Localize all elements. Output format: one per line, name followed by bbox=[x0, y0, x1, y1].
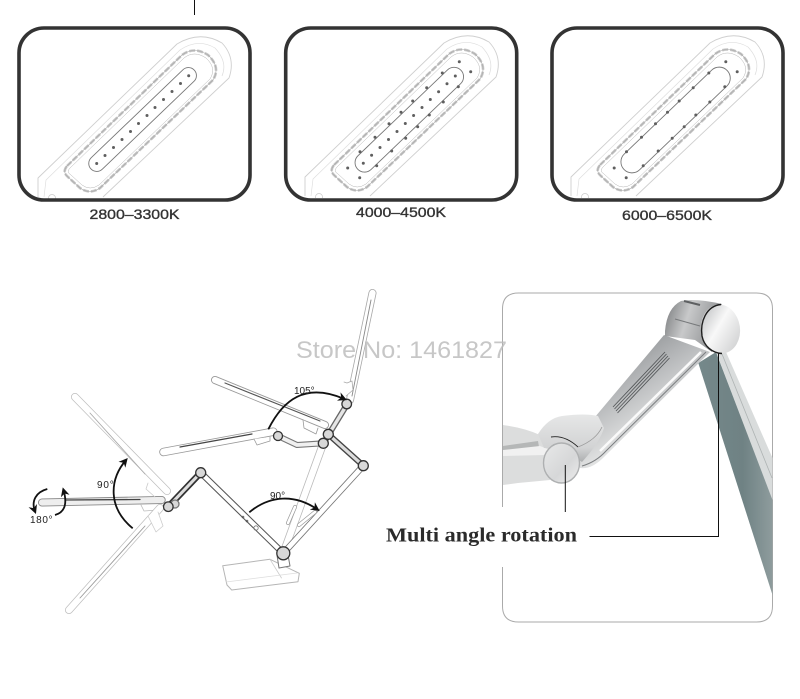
panel frame bbox=[286, 28, 517, 200]
elbow disc bbox=[544, 443, 580, 483]
lamp head: raised left bbox=[215, 380, 325, 434]
vent slots bbox=[613, 352, 670, 413]
lamp head: lower left bbox=[164, 432, 273, 452]
label: 90 degrees arm: 90° bbox=[270, 491, 285, 502]
caption: multi angle rotation: Multi angle rotation bbox=[386, 524, 577, 546]
label: 4000–4500K bbox=[356, 204, 447, 220]
panel frame bbox=[502, 293, 772, 622]
label: 90 degrees left: 90° bbox=[97, 480, 115, 491]
arrow: 90 degree head sweep bbox=[114, 460, 133, 528]
arrow: 90 degree arm sweep bbox=[249, 499, 318, 512]
upper disc bbox=[701, 304, 740, 352]
label: 2800–3300K bbox=[90, 206, 180, 222]
panel: photo of joint rotation bbox=[502, 293, 772, 622]
lamp head outline bbox=[38, 37, 231, 202]
panel frame bbox=[19, 28, 250, 200]
lamp head: vertical bbox=[344, 293, 372, 400]
panel: 2800-3300K bbox=[19, 28, 250, 222]
line diagram: lamp rotation positions bbox=[42, 293, 372, 610]
label: 105 degrees: 105° bbox=[294, 386, 315, 397]
panel: 6000-6500K bbox=[552, 28, 783, 223]
label: 180 degrees: 180° bbox=[30, 515, 53, 526]
lower arm bbox=[698, 352, 772, 595]
label: 6000–6500K bbox=[622, 207, 713, 223]
arrow: 105 degree sweep bbox=[268, 392, 344, 429]
panel: 4000-4500K bbox=[286, 28, 517, 220]
LED strip: three rows bbox=[346, 60, 472, 179]
pivot joints bbox=[164, 399, 368, 560]
lamp head: up-left bbox=[75, 397, 167, 497]
leader line: elbow joint bbox=[564, 465, 566, 512]
panel frame bbox=[552, 28, 783, 200]
lamp head stub bbox=[503, 425, 555, 485]
arrow: 180 degree rotate down bbox=[34, 489, 47, 512]
elbow knuckle bbox=[538, 414, 604, 462]
upper hinge bbox=[665, 300, 722, 352]
lamp head: down-left bbox=[69, 508, 163, 610]
LED strip: single row bbox=[85, 64, 200, 175]
arrow: 180 degree rotate up bbox=[55, 490, 65, 515]
arm: raised position bbox=[278, 405, 347, 553]
lamp arm photo bbox=[503, 300, 772, 595]
base bbox=[223, 559, 299, 590]
LED strip: two outer rows bbox=[613, 60, 739, 179]
watermark: Store No: 1461827 bbox=[296, 337, 507, 364]
leader line: upper joint bbox=[590, 353, 718, 536]
lamp head outline bbox=[305, 36, 498, 201]
top tick line bbox=[194, 0, 196, 15]
lamp head: horizontal bbox=[42, 500, 162, 511]
arm: left position bbox=[168, 473, 283, 553]
lamp head outline bbox=[571, 36, 764, 201]
arm: right position bbox=[283, 434, 363, 553]
upper arm bbox=[575, 335, 710, 468]
